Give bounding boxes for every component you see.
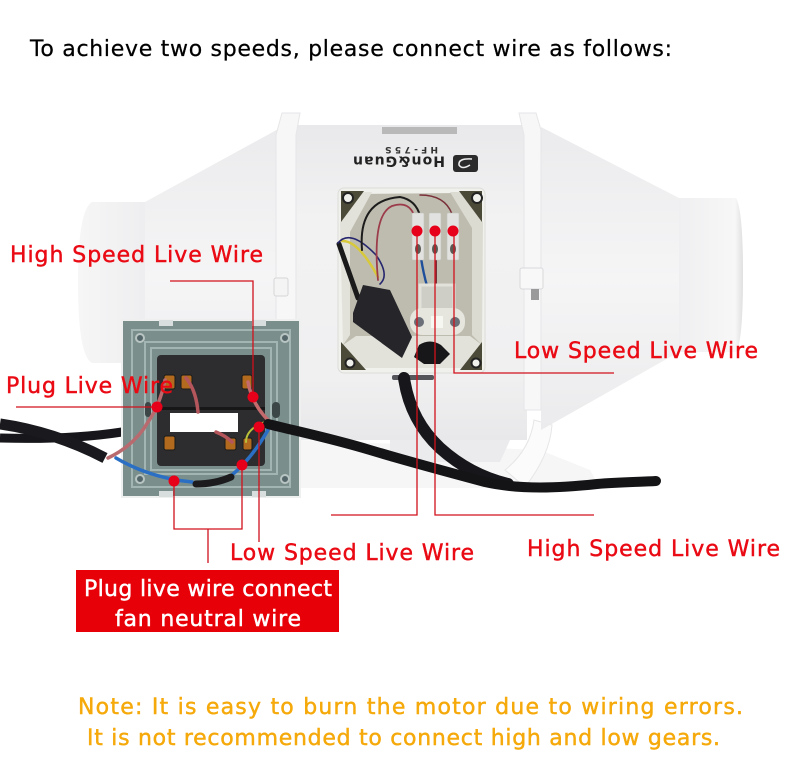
terminal block <box>412 213 459 260</box>
wall switch <box>122 320 300 497</box>
blue wire right <box>232 430 268 475</box>
note: Note: It is easy to burn the motor due to wiring errors. <box>78 695 743 720</box>
capacitor wires <box>338 195 452 305</box>
fan right strap <box>519 113 541 410</box>
fan left cone <box>145 127 282 425</box>
side slots <box>145 402 280 418</box>
box top bevel <box>340 192 372 345</box>
plate <box>122 320 300 497</box>
connection dots <box>152 226 458 486</box>
plate tabs <box>159 320 266 497</box>
box corner mounts <box>341 191 482 370</box>
brand text: Hon&Guan <box>353 152 445 168</box>
plate ribs <box>132 330 290 487</box>
title: To achieve two speeds, please connect wire as follows: <box>29 37 672 62</box>
white sticker <box>170 413 238 432</box>
junction box <box>338 188 485 373</box>
switch wiring <box>108 378 268 484</box>
illustration: inline duct fan <box>0 113 743 497</box>
red wire right <box>248 382 268 420</box>
callout leader lines <box>16 231 614 563</box>
fan right cone <box>541 127 679 430</box>
plate screws <box>136 334 289 483</box>
box gland <box>392 375 434 380</box>
box right bevel <box>450 192 483 345</box>
wire tape <box>196 477 231 484</box>
brand logo <box>453 155 478 172</box>
red jumper <box>186 378 198 412</box>
fan cable <box>404 378 508 484</box>
switch plate cable behind <box>0 432 122 438</box>
label: low speed live wire, bottom: Low Speed Live Wire <box>230 541 474 566</box>
callout: plug live wire connect fan neutral wire <box>76 570 339 632</box>
fan right pipe <box>678 198 743 352</box>
product label plate <box>382 127 457 134</box>
label: plug live wire: Plug Live Wire <box>6 374 173 399</box>
switch body <box>157 355 265 466</box>
callout: plug live wire connect fan neutral wire: Plug live wire connect <box>84 577 332 602</box>
fan left strap <box>276 113 300 330</box>
red live wire left <box>108 380 165 458</box>
fan left pipe <box>78 202 145 363</box>
cable clamp <box>410 308 465 335</box>
note <box>78 695 743 751</box>
terminals <box>164 375 252 450</box>
yellow green wire <box>246 421 268 442</box>
fan base bracket <box>300 420 600 488</box>
cable grommet <box>414 342 450 364</box>
left mains cable <box>0 424 105 458</box>
label: high speed live wire, left: High Speed Live Wire <box>10 243 263 268</box>
strap clip right <box>520 268 543 300</box>
strap clip left <box>274 278 288 296</box>
box interior <box>343 193 482 368</box>
right mains cable <box>268 424 656 488</box>
note: It is not recommended to connect high and low gears. <box>87 726 720 751</box>
body divider <box>157 407 265 410</box>
blue wire left <box>116 458 192 482</box>
callout: plug live wire connect fan neutral wire: fan neutral wire <box>115 607 301 632</box>
model text: HF-75S <box>385 144 438 154</box>
cable clamp window <box>420 285 454 310</box>
capacitor <box>353 285 412 358</box>
fan centre body <box>295 125 527 440</box>
label: high speed live wire, bottom: High Speed Live Wire <box>527 537 780 562</box>
box screw holes <box>343 193 482 368</box>
box floor bevel <box>343 336 482 368</box>
label: low speed live wire, right: Low Speed Live Wire <box>514 339 758 364</box>
